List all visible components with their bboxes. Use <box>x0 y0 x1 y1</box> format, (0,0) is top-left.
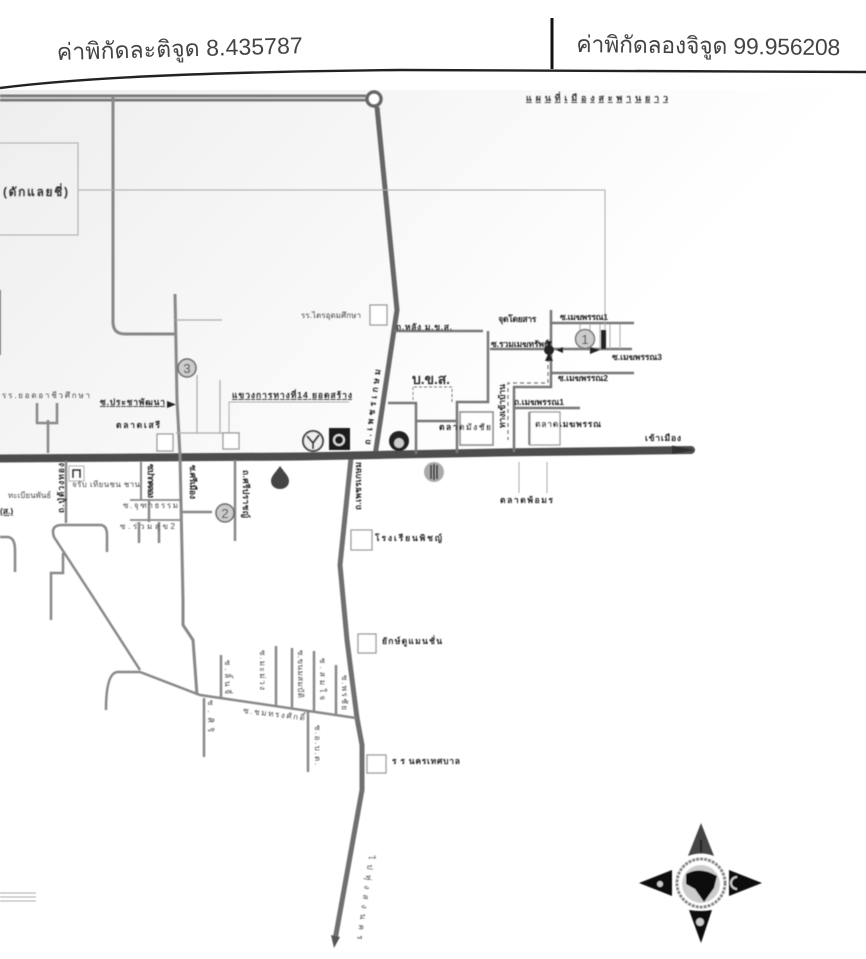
road map <box>0 91 762 948</box>
junction marker <box>544 330 606 361</box>
map title: แผนที่เมืองสะพานยาว <box>526 91 668 103</box>
southern highway with arrow <box>331 458 362 948</box>
road and place labels: ซ.เมฆพรรณ2 <box>558 373 608 383</box>
vertical road labels: ถ.เพชรเกษม <box>353 462 363 510</box>
icon: gas sign <box>69 466 84 481</box>
header: latitude: ค่าพิกัดละติจูด 8.435787 <box>56 32 303 66</box>
left cropped legend: ทะเบียนพันธ์ <box>8 490 51 500</box>
vertical road labels: ซ.พรชัย <box>340 675 349 710</box>
road and place labels: ซ.เมฆพรรณ1 <box>560 312 608 322</box>
icon: drop <box>271 466 289 489</box>
vertical road labels: ทางเข้าบ้าน <box>497 384 507 428</box>
vertical road labels: ซ.ปากคลอง <box>146 464 156 498</box>
vertical road labels: ซ.ลิ้นจี่ <box>223 660 234 694</box>
left cropped legend <box>0 490 51 516</box>
road and place labels: ยักษ์ดูแมนชั่น <box>382 634 442 647</box>
road and place labels: บ.ข.ส. <box>412 371 450 387</box>
road and place labels: ซ.ร่วมสุข2 <box>120 522 176 531</box>
road and place labels: ถ.หลัง ม.ข.ส. <box>396 322 452 332</box>
numbered marker 3 <box>178 359 196 377</box>
numbered marker 2 <box>216 504 234 522</box>
western side roads <box>0 96 356 718</box>
road and place labels: ซ.ประชาพัฒนา <box>100 397 165 407</box>
icon: bank round <box>303 431 323 451</box>
numbered marker 3: 3 <box>183 361 191 376</box>
top road <box>0 92 381 106</box>
road and place labels: เข้าเมือง <box>645 433 681 443</box>
bottom-left rail marks <box>0 893 36 901</box>
eastern side roads <box>388 310 634 454</box>
road and place labels: โรงเรียนพิชญ์ <box>374 533 442 544</box>
road and place labels: ถ.เมฆพรรณ1 <box>514 397 564 407</box>
road and place labels: จุดโดยสาร <box>498 314 537 325</box>
road and place labels: ตลาดเสรี <box>116 420 160 430</box>
numbered marker 2: 2 <box>221 506 229 521</box>
vertical road labels: ถ.เพชรเกษม <box>362 369 383 445</box>
icon: emblem <box>424 462 444 482</box>
landmark boxes <box>157 305 560 773</box>
road and place labels: รร.ยอดอาชีวศึกษา <box>2 391 90 400</box>
icon: black square bank <box>329 428 350 450</box>
icon: bank dark round <box>389 431 409 451</box>
road and place labels: ตลาดมังชัย <box>439 422 491 432</box>
thin leader lines <box>0 143 620 493</box>
road and place labels <box>2 311 681 766</box>
road and place labels: แขวงการทางที่14 ยอดสร้าง <box>232 388 352 400</box>
road and place labels: ซ.ชมทรงศักดิ์ <box>243 704 307 723</box>
road and place labels: ซ.เมฆพรรณ3 <box>612 352 662 362</box>
left cropped legend: (ส.) <box>0 506 13 516</box>
road and place labels: ตลาดเมฆพรรณ <box>535 419 601 429</box>
numbered marker 1: 1 <box>581 332 589 347</box>
vertical road labels: ซ.ศรีเมือง <box>188 465 198 499</box>
road and place labels: ร ร นครเทศบาล <box>392 756 460 766</box>
header: longitude: ค่าพิกัดลองจิจูด 99.956208 <box>576 31 840 61</box>
vertical road labels: ถ.ปู่ด้วงทอง <box>56 463 67 513</box>
vertical road labels: ไปทุ่งสงนคร <box>355 854 376 941</box>
north-south highway <box>375 107 397 456</box>
icon: compass <box>639 823 762 943</box>
road and place labels: ตลาดพ้อมร <box>500 495 553 505</box>
main east-west road <box>0 446 695 458</box>
vertical road labels: ซ.สมใจ <box>318 658 327 700</box>
header rule <box>0 18 866 88</box>
vertical road labels: ถ.ศรีปราชญ์ <box>240 470 251 518</box>
dashed route <box>508 358 548 440</box>
vertical road labels: ซ.ขนมสมบัติ <box>296 650 305 698</box>
road and place labels: ซ.รวมเมฆทรัพย์ <box>491 339 549 349</box>
southern side lanes <box>204 646 336 772</box>
road and place labels: รร.ไตรอุดมศึกษา <box>301 311 361 320</box>
road and place labels: จรับ เทียนชน ชาน <box>72 480 141 489</box>
vertical road labels: ซ.มะม่วง <box>258 650 267 690</box>
vertical road labels: ซ.ศิริ <box>206 700 215 733</box>
vertical road labels <box>56 369 507 941</box>
cropped panel label: (ดักแลยชี่) <box>3 183 68 199</box>
vertical road labels: ซ.อ.บ.ต. <box>313 725 322 765</box>
numbered marker 1 <box>576 330 594 348</box>
road and place labels: ซ.จุฑาธรรม <box>123 501 178 510</box>
